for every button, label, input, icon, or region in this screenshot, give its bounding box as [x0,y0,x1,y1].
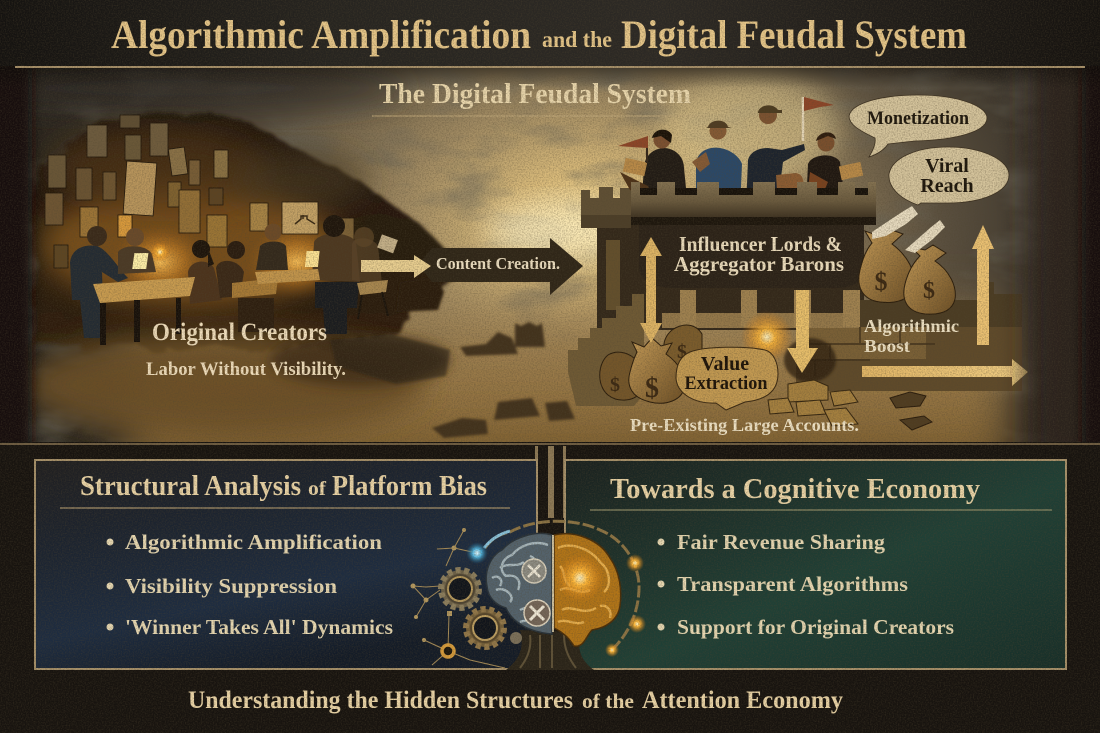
creators at tables [70,215,398,345]
label: algorithmic boost: Algorithmic [864,316,959,336]
bullet list: Algorithmic Amplification [125,530,382,554]
scrolls [872,206,945,253]
cave of creators [25,112,462,440]
circuit nodes [413,530,505,668]
brick wall [796,327,1022,391]
bullet list: Visibility Suppression [125,574,337,598]
speech bubble: monetization [849,95,987,157]
orbit nodes [466,542,646,657]
bullet list [106,530,393,639]
label: influencer lords and aggregator barons [674,232,844,276]
arrow: content creation [361,238,583,295]
main title [111,12,967,57]
arrow: algorithmic boost up [972,225,994,345]
label: algorithmic boost [864,316,959,356]
heading: Towards a Cognitive Economy [610,473,980,505]
arrow: content creation: Content Creation. [436,254,560,273]
bullet list [658,530,954,639]
lower money bags: $ [610,374,620,396]
speech bubble: value extraction: Value [701,353,749,375]
brain left hemisphere [486,533,552,634]
speech bubble: value extraction [676,347,778,410]
speech bubble: monetization: Monetization [867,108,969,129]
main title: and the [542,27,612,52]
brain right hemisphere [554,534,621,646]
arrow: algorithmic boost right [862,359,1028,386]
section heading: The Digital Feudal System [379,78,691,110]
footer tagline: of the [582,689,634,713]
gears [441,570,522,657]
centre divider [535,446,566,518]
heading: Platform Bias [332,470,487,502]
speech bubble: viral reach: Reach [920,175,974,197]
speech bubble: viral reach: Viral [925,155,969,177]
bullet list: Transparent Algorithms [677,572,908,596]
speech bubble: value extraction: Extraction [684,373,768,394]
brain midline [552,535,554,632]
heading: Structural Analysis [80,470,301,502]
castle glow [741,311,793,363]
bullet list: Fair Revenue Sharing [677,530,886,554]
lower money bags: $ [645,373,659,404]
footer tagline [188,687,843,714]
speech bubble: viral reach [889,147,1009,205]
label: algorithmic boost: Boost [864,336,910,356]
wall of pinned papers [45,115,354,268]
heading: of [308,478,326,500]
castle: influencer lords [568,97,1022,430]
lord figures on battlements [620,105,863,208]
coin blocks [768,380,858,426]
x node lower [524,600,550,626]
upper money bags [859,229,955,314]
label: influencer lords and aggregator barons: Aggregator Barons [674,252,844,276]
rear tower [581,187,631,228]
panel: towards a cognitive economy [565,460,1066,669]
cliff rocks [330,276,450,384]
footer tagline: Attention Economy [642,687,843,714]
upper money bags: $ [923,278,935,304]
arrow: double-headed value flow [640,237,662,343]
lower band background [0,442,1100,733]
upper money bags: $ [874,267,888,296]
flags [618,97,834,163]
label: labor without visibility: Labor Without Visibility. [146,359,346,380]
ground rubble [432,322,575,438]
right back wall [850,282,1022,390]
heading [80,470,487,502]
bullet list: 'Winner Takes All' Dynamics [125,615,393,639]
lower merlons and band [662,313,859,328]
battlements [631,188,876,196]
castle body [597,222,864,330]
lower money bags: $ [677,341,687,363]
name plate [639,225,864,288]
label: original creators: Original Creators [152,319,327,346]
x node upper [522,559,546,583]
main title: Digital Feudal System [621,12,967,57]
bullet list: Support for Original Creators [677,615,954,639]
lower money bags [600,325,702,404]
main title: Algorithmic Amplification [111,12,531,57]
arrow: extraction down [787,290,818,373]
circuit arc [485,521,639,650]
scene edge shading [0,40,1100,470]
panel: structural analysis of platform bias [35,460,537,669]
tree trunk [506,630,594,670]
label: pre-existing large accounts: Pre-Existing Large Accounts. [630,415,859,435]
header band [0,0,1100,66]
footer tagline: Understanding the Hidden Structures [188,687,573,714]
label: influencer lords and aggregator barons: Influencer Lords & [679,232,842,256]
left steps [568,294,644,406]
icon: brain with gears and circuits [410,521,646,670]
orange glow [556,554,604,602]
